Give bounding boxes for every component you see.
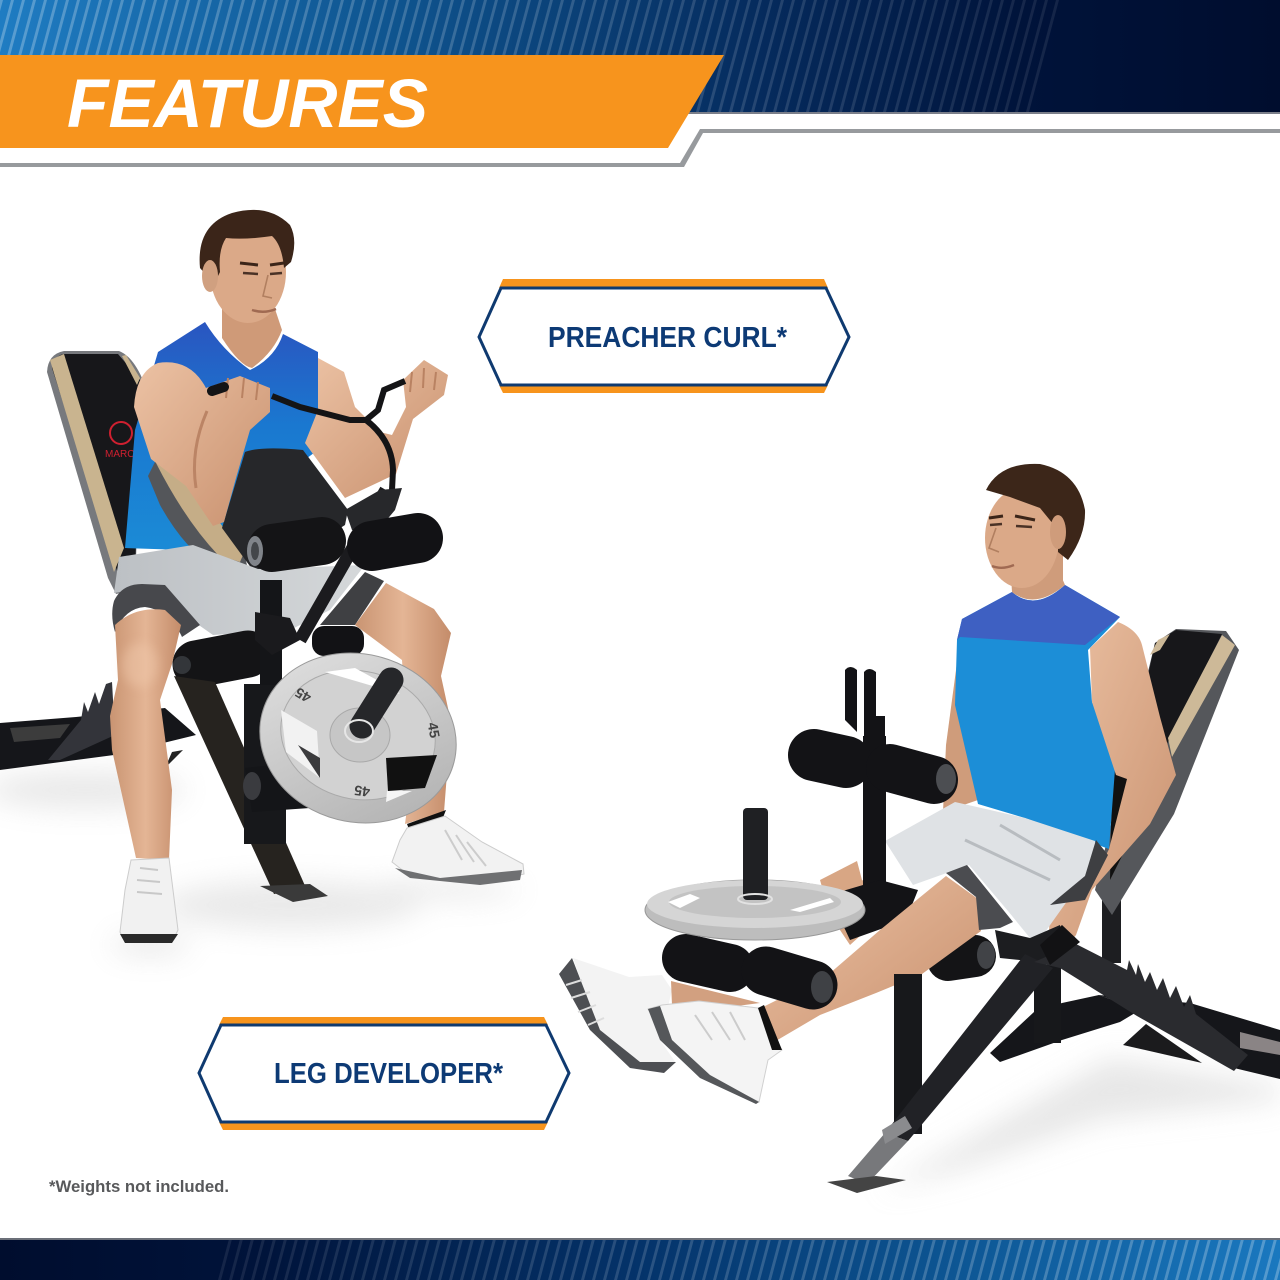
- neck and head: [985, 464, 1085, 599]
- callout: preacher curl: [479, 279, 849, 393]
- shadow: left figure: [0, 772, 520, 955]
- shadow: right figure: [880, 1058, 1280, 1190]
- photo: man using leg developer: [559, 464, 1280, 1193]
- bench back pad: MARC: [105, 449, 134, 460]
- foam roller: near: [766, 971, 833, 1003]
- callout: leg developer: [199, 1017, 569, 1130]
- shorts: [885, 802, 1108, 938]
- callout: leg developer: LEG DEVELOPER*: [274, 1058, 504, 1090]
- shoe: right: [392, 810, 524, 885]
- arm: near arm: [1048, 622, 1176, 952]
- neck and head: [200, 210, 294, 368]
- upright post and brackets: [829, 667, 918, 940]
- weight plate: [242, 633, 474, 843]
- arm: far arm: [943, 640, 978, 812]
- hand and far leg: [820, 861, 900, 945]
- weight plate: 45: [353, 782, 371, 800]
- arm: near left arm with fist: [134, 362, 270, 526]
- leg: right thigh and shin: [355, 583, 451, 824]
- weight plate: 45: [425, 721, 443, 739]
- photo: man doing preacher curl: [0, 210, 524, 943]
- top banner: [0, 0, 1280, 167]
- weight post: [738, 808, 772, 904]
- seat pad and seat roller: [948, 925, 1062, 969]
- arm: far right arm with fist: [305, 358, 448, 498]
- shorts cuff: [946, 865, 1013, 930]
- leg: near thigh and shin: [759, 876, 981, 1045]
- bench front legs: [827, 954, 1053, 1193]
- shoe: far: [559, 958, 676, 1073]
- foam rollers: upper pair: [814, 755, 956, 794]
- shorts: [112, 545, 384, 637]
- weight post: [345, 680, 391, 742]
- shoe: near: [648, 1001, 782, 1104]
- leg: left thigh and shin: [110, 609, 181, 860]
- seat lower pad and rollers: [173, 626, 364, 674]
- title: features: FEATURES: [67, 65, 428, 142]
- foam rollers: lower pair: [686, 958, 730, 968]
- bench rear frame: [0, 682, 196, 770]
- footnote: *Weights not included.: [49, 1177, 229, 1196]
- weight plate: [645, 880, 865, 940]
- bench rear rail and ratchet base: [990, 898, 1280, 1079]
- bench rear strut with ratchet: [1034, 925, 1248, 1071]
- curl bar: [212, 381, 405, 490]
- weight plate: 45: [292, 684, 314, 706]
- bottom banner: [0, 1238, 1280, 1280]
- torso: blue tank top: [125, 322, 318, 552]
- shoe: left: [120, 858, 178, 943]
- title: features: [0, 55, 724, 148]
- foam rollers: preacher attachment: [247, 536, 418, 566]
- callout: preacher curl: PREACHER CURL*: [548, 322, 788, 354]
- torso: blue tank top: [955, 578, 1120, 849]
- bench back pad: [1095, 629, 1239, 915]
- preacher pad: [148, 448, 348, 580]
- leg: far shin: [671, 981, 760, 1012]
- bench front leg and post: [174, 488, 402, 902]
- bench back pad: [47, 351, 142, 594]
